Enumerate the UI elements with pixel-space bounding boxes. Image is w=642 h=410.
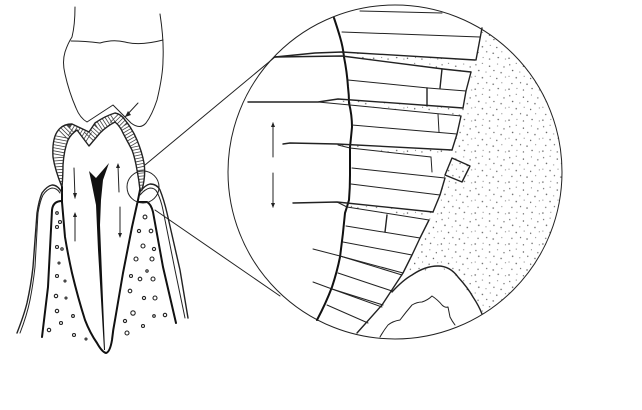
- magnification lines: [145, 57, 280, 296]
- right bone and gum: [138, 184, 188, 323]
- dentino-enamel junction: [317, 18, 352, 320]
- lower tooth crown with hatched enamel: [53, 113, 145, 190]
- stippled dentine area: [410, 32, 562, 312]
- infographic: tooth with magnified enamel detail: [16, 4, 562, 354]
- enamel rods and cracks: [248, 11, 482, 333]
- root outline: [62, 187, 140, 353]
- circle outline: [228, 5, 562, 339]
- dentine bump: [392, 266, 482, 314]
- detached enamel fragment: [445, 158, 470, 182]
- magnified detail circle: [228, 5, 570, 339]
- bone trabecular dots: [47, 212, 167, 340]
- movement arrows in tooth: [73, 163, 122, 241]
- pulp canal: [89, 163, 109, 350]
- left bone and gum: [17, 185, 62, 337]
- stippled crack fill: [337, 52, 475, 220]
- contact arrow: [125, 103, 138, 117]
- vertical double arrow: [271, 122, 275, 208]
- small circle marking detail area: [127, 171, 159, 203]
- pulp outline: [380, 296, 455, 337]
- upper tooth: [64, 7, 163, 126]
